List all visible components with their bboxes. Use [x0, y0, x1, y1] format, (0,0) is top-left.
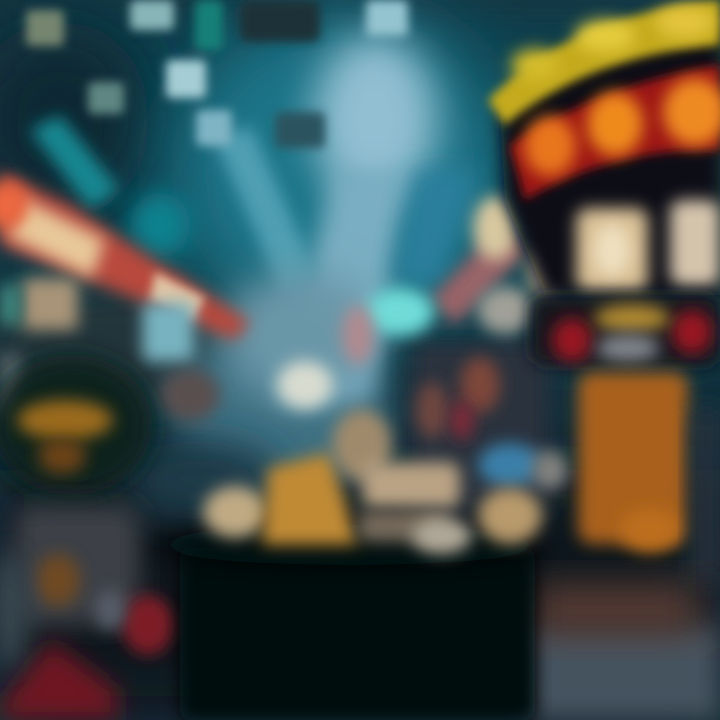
- right stalls: [342, 196, 563, 510]
- light beam: [30, 10, 510, 400]
- right base with red lights: [530, 295, 720, 365]
- left stripes banner: [0, 172, 250, 421]
- white glow: [277, 361, 333, 409]
- food in pot: [203, 409, 568, 554]
- right ground: [530, 585, 720, 720]
- pot: [155, 525, 545, 720]
- right carousel canopy: [488, 0, 720, 295]
- orange column: [578, 372, 720, 580]
- glowing lanterns: [576, 200, 720, 292]
- falling squares: [26, 0, 408, 148]
- left character: [0, 355, 174, 720]
